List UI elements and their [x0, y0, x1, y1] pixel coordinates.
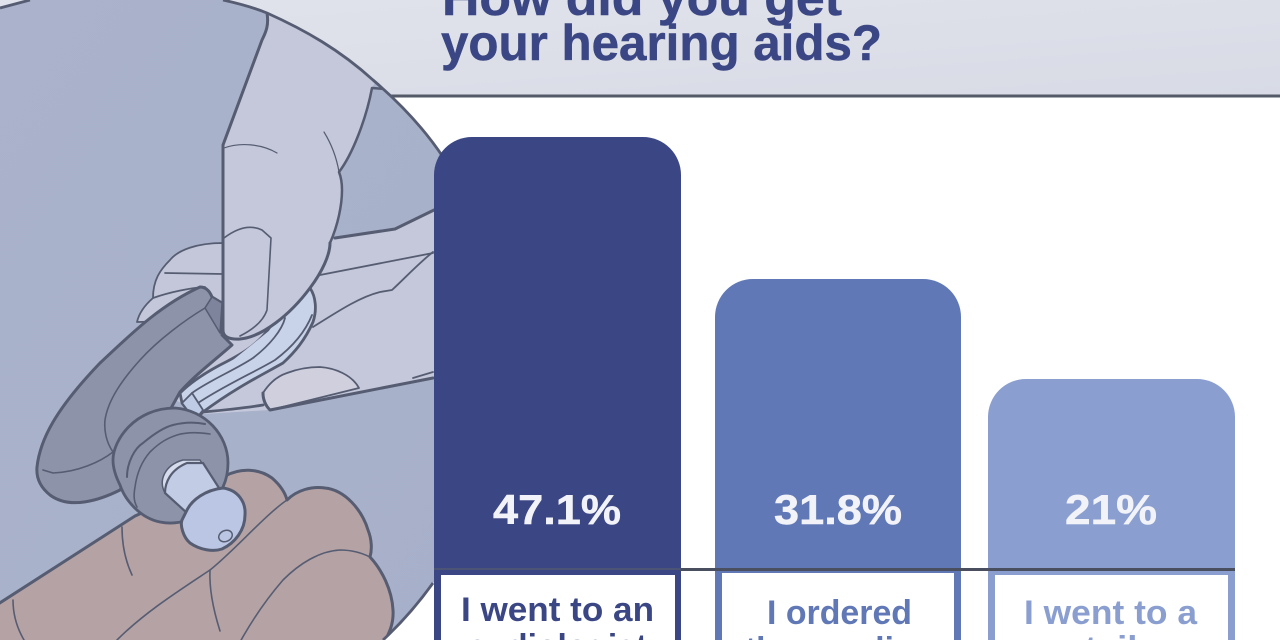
value: 31.8% — [774, 486, 902, 533]
bar: ordered online — [715, 279, 961, 640]
thumb — [223, 0, 385, 339]
label text — [745, 594, 933, 640]
hearing aid collar — [113, 408, 228, 523]
title: your hearing aids? — [441, 15, 882, 71]
label box — [441, 575, 675, 640]
illustration: hands holding a hearing aid — [0, 0, 470, 640]
fingernail — [263, 367, 359, 410]
skin: lower hand — [0, 470, 393, 640]
illustration circle outline — [0, 0, 443, 640]
header band — [0, 0, 1280, 95]
hearing aid body — [37, 287, 232, 503]
value: 21% — [1065, 486, 1157, 533]
header rule — [385, 94, 1280, 98]
bar: audiologist — [434, 137, 681, 640]
hearing aid stem — [162, 460, 219, 513]
hearing aid dome tip — [181, 488, 245, 550]
bar: retailer — [988, 379, 1235, 640]
hearing aid tube — [180, 288, 315, 420]
label box — [722, 573, 954, 640]
back fingers — [137, 243, 225, 322]
label text: I went to a — [1024, 594, 1198, 632]
illustration background — [0, 0, 470, 640]
index finger — [175, 208, 440, 414]
baseline rule — [680, 568, 1235, 571]
label text: I went to an — [461, 591, 654, 629]
thumbnail — [224, 227, 271, 336]
label text: I ordered — [767, 594, 912, 632]
value: 47.1% — [493, 486, 621, 533]
label box — [995, 575, 1228, 640]
